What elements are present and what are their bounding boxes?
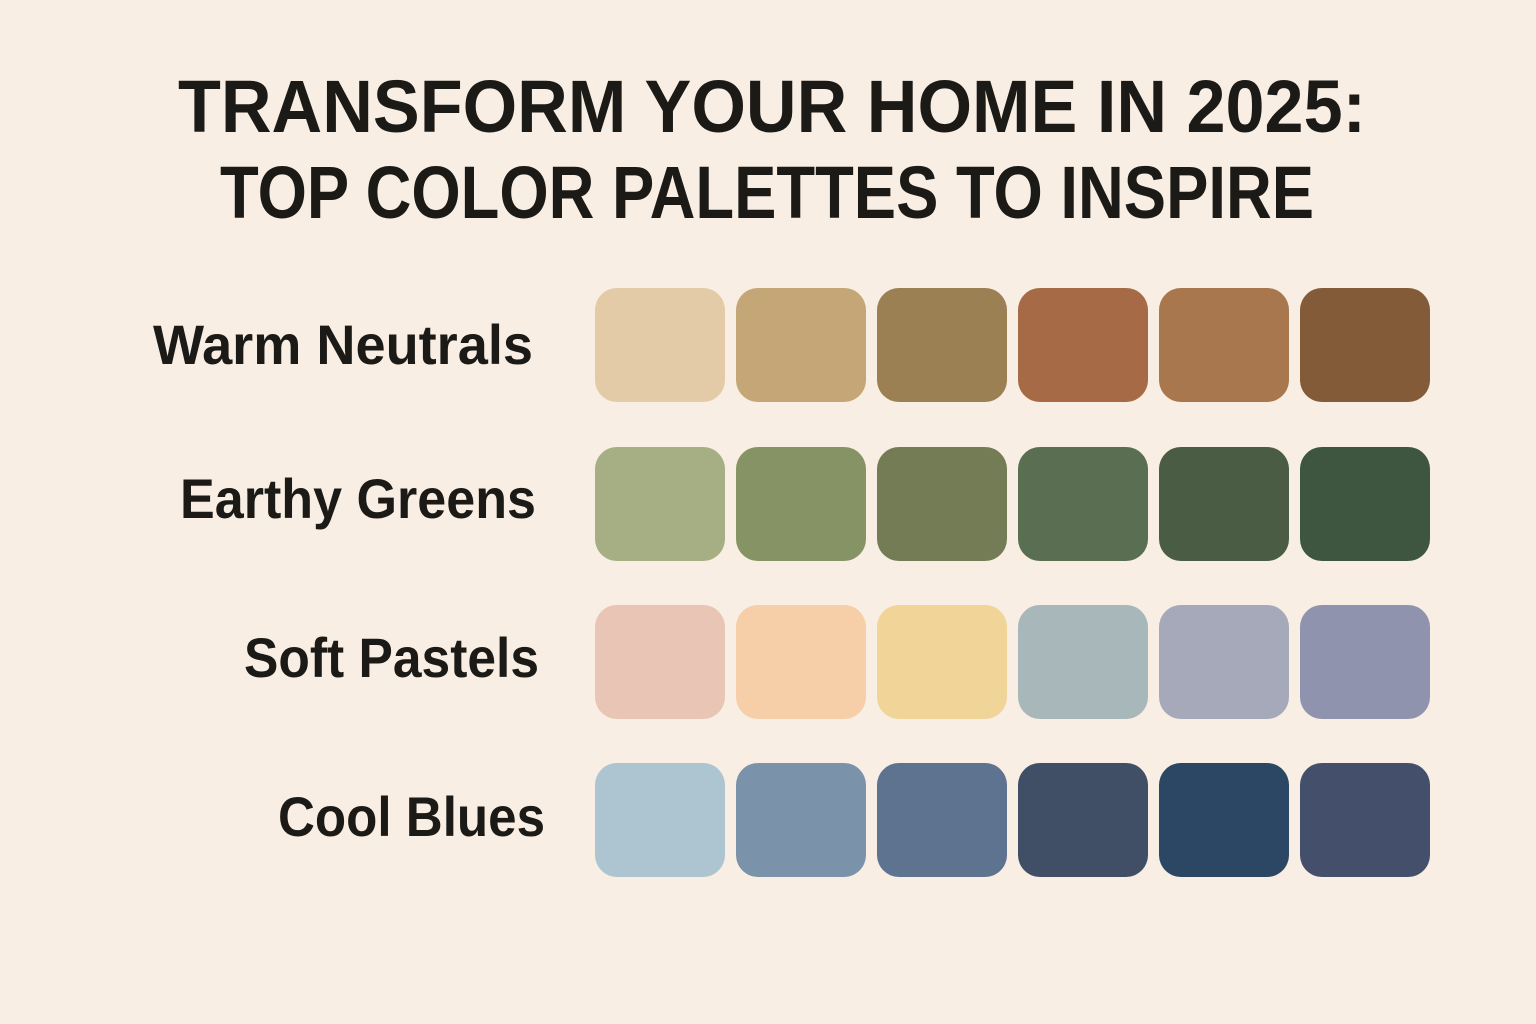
swatches: earthy greens	[595, 447, 1430, 561]
panel: earthy greens	[180, 447, 1430, 561]
label: Earthy Greens: Earthy Greens	[180, 467, 536, 530]
swatches: warm neutrals	[595, 288, 1430, 402]
title	[178, 65, 1366, 234]
panel: cool blues	[278, 763, 1430, 877]
title: TOP COLOR PALETTES TO INSPIRE	[220, 151, 1314, 234]
swatches: soft pastels	[595, 605, 1430, 719]
swatches: cool blues	[595, 763, 1430, 877]
label: Cool Blues: Cool Blues	[278, 785, 545, 848]
title: TRANSFORM YOUR HOME IN 2025:	[178, 65, 1366, 148]
label: Soft Pastels: Soft Pastels	[244, 626, 539, 689]
panel: warm neutrals	[153, 288, 1430, 402]
panel: soft pastels	[244, 605, 1430, 719]
label: Warm Neutrals: Warm Neutrals	[153, 313, 533, 376]
